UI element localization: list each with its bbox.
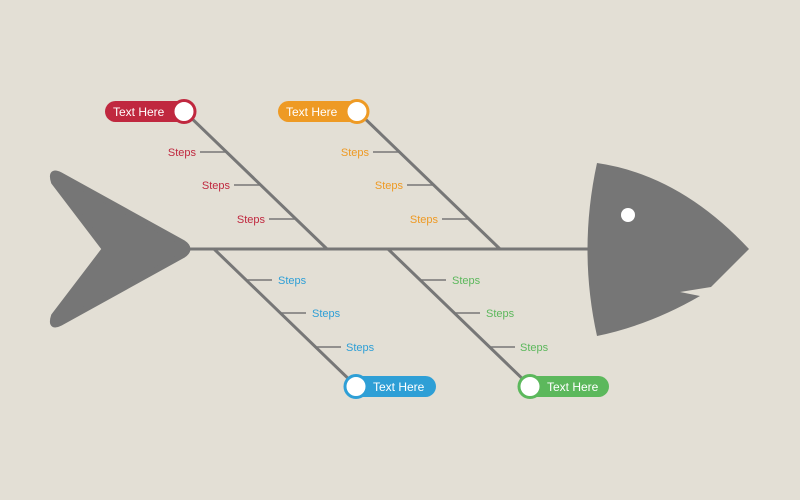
label: orange — [278, 100, 368, 122]
bone: blue — [214, 249, 357, 387]
steps: blue: Steps — [278, 275, 307, 287]
label: blue: Text Here — [373, 380, 425, 394]
steps: orange: Steps — [341, 147, 369, 159]
label: orange: Text Here — [286, 105, 338, 119]
label: green — [518, 376, 609, 398]
steps: green: Steps — [452, 275, 481, 287]
fish tail — [53, 174, 187, 324]
label: green: Text Here — [547, 380, 599, 394]
label: red — [105, 100, 195, 122]
label: red: Text Here — [113, 105, 165, 119]
steps: orange: Steps — [410, 214, 438, 226]
steps: orange: Steps — [375, 180, 403, 192]
eye — [621, 208, 635, 222]
fish head — [588, 163, 749, 336]
steps: blue — [278, 275, 375, 354]
steps: blue: Steps — [346, 342, 375, 354]
steps: red: Steps — [237, 214, 265, 226]
fish spine — [185, 248, 590, 250]
steps: green — [452, 275, 549, 354]
steps: red — [168, 147, 265, 226]
steps: red: Steps — [202, 180, 230, 192]
steps: orange — [341, 147, 438, 226]
bone: green — [388, 249, 531, 387]
bone: red — [184, 111, 327, 249]
steps: red: Steps — [168, 147, 196, 159]
label: blue — [345, 376, 436, 398]
steps: green: Steps — [520, 342, 549, 354]
bone: orange — [357, 111, 500, 249]
steps: green: Steps — [486, 308, 515, 320]
steps: blue: Steps — [312, 308, 341, 320]
